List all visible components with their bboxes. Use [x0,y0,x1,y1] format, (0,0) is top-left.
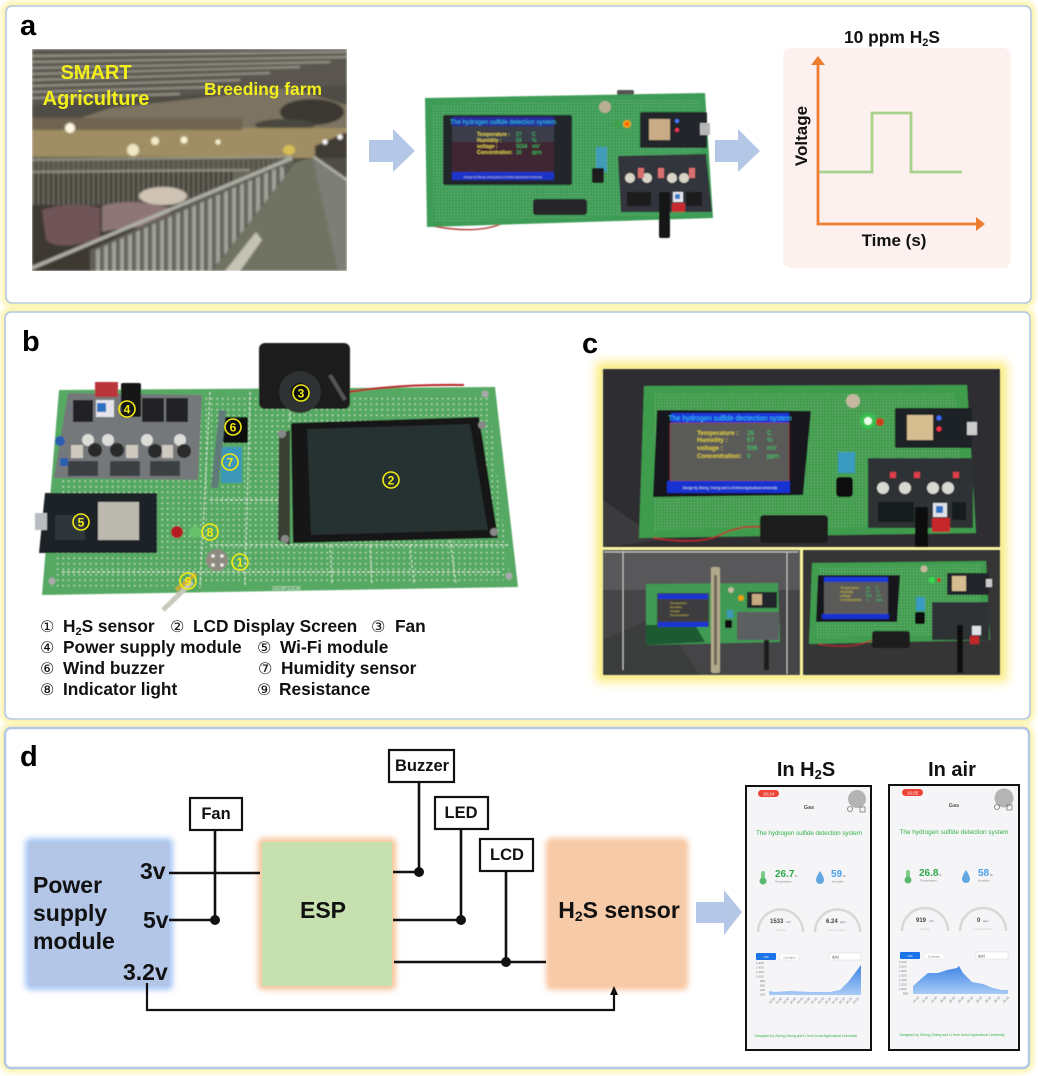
temperature reading: Temperature [920,878,937,882]
component number markers: 6 [230,420,237,434]
area chart: 1,000 [756,974,764,978]
component legend: Wi-Fi module [280,637,389,657]
circuit board photo: The hydrogen sulfide detection system [450,119,556,126]
area chart: 25:00 [957,995,965,1004]
photo: breeding farm [32,49,347,271]
tabs: 实时 [978,954,986,958]
phone: in H2S [746,786,871,1050]
gauges: ppm [983,919,989,923]
bottom right photo: Concentration: [840,598,862,602]
area chart: 24:20 [838,996,846,1005]
area chart [899,960,1010,1004]
component legend: ① [40,617,54,636]
humidity reading: Humidity [978,878,990,882]
chart title: 2 [922,37,928,49]
temperature reading [760,869,798,884]
main photo: 57 [747,437,755,444]
area chart: 24:15 [824,996,832,1005]
axes [818,64,978,224]
area chart: 25:20 [984,995,992,1004]
tabs [756,953,861,960]
area chart: 25:00 [948,995,956,1004]
circuit board photo: Humidity : [477,138,502,144]
component legend: Fan [395,616,426,636]
component legend: ③ [371,617,385,636]
main photo: % [767,437,773,444]
main photo: 0 [747,453,751,460]
Buzzer box [389,750,454,782]
temperature reading: °C [938,873,942,877]
temperature reading: °C [794,874,798,878]
main photo: C [767,430,772,437]
circuit board photo: ppm [532,150,542,156]
buzzer and humidity sensor [211,410,248,488]
component legend: ② [170,617,184,636]
indicator LEDs [171,526,201,538]
area chart: 24:20 [831,996,839,1005]
main photo [603,369,1000,547]
phone title: in H2S: In H [777,759,815,781]
main photo: ppm [767,453,779,460]
bottom right photo: 0 [866,598,868,602]
bottom right photo: % [876,590,879,594]
main photo: mV [767,445,777,452]
area chart: 1,200 [756,970,764,974]
area chart: 23:50 [775,996,783,1005]
bottom left photo: Humidity [670,605,682,609]
system title: The hydrogen sulfide detection system [900,829,1008,836]
bottom right photo: ppm [876,598,883,602]
H2S sensor block: 2 [575,908,583,924]
component number markers: 1 [237,556,244,570]
bottom right photo: Humidity [840,590,853,594]
bottom right photo [803,550,1000,675]
component legend [40,616,426,699]
H2S sensor block [546,838,688,990]
main photo: Design by Zheng, Cheng and Li of Anhui Agricultural University [683,486,778,490]
label b: b [22,326,40,358]
ESP block [258,838,396,990]
bottom right photo: mV [876,594,882,598]
gauges: Voltage [920,927,930,931]
component legend: ⑥ [40,659,54,678]
component number markers: 3 [298,386,305,400]
component legend: Resistance [279,679,371,699]
power supply module [54,382,202,480]
wiring [147,782,618,1010]
humidity reading: % [990,873,993,877]
area chart: 25:20 [966,995,974,1004]
status bar [902,789,923,796]
phone title: in air: In air [928,759,976,781]
bottom left photo: voltage [670,609,680,613]
circuit board photo: C [532,132,536,138]
LCD screen [278,417,498,545]
circuit board photo: 5034 [516,144,527,150]
bottom right photo: 26 [866,586,870,590]
fan [259,343,350,413]
gauges: Concentration [974,927,993,931]
Fan box: Fan [201,805,231,823]
main photo: voltage : [697,445,723,452]
humidity reading: Humidity [832,880,844,884]
area chart: 800 [760,979,765,983]
area chart: 24:20 [912,995,920,1004]
tabs: Volt [763,955,769,959]
area chart: 1,000 [899,987,907,991]
area chart: 600 [760,984,765,988]
system title: The hydrogen sulfide detection system [756,830,862,837]
response line [818,113,962,172]
circuit board photo: 53 [516,138,522,144]
component legend: Indicator light [63,679,177,699]
area chart: 24:05 [803,996,811,1005]
gauges: 919 [916,918,927,924]
circuit board photo: Concentration: [477,150,513,156]
area chart: 1,600 [756,961,764,965]
phone: in air [889,785,1019,1050]
phone: in air: Gas [949,803,959,809]
photo group c [596,362,1007,682]
panel a [6,6,1031,303]
component number markers: 5 [78,516,85,530]
gauges: ppm [840,920,846,924]
area chart: 25:20 [975,995,983,1004]
bottom right photo: 596 [866,594,872,598]
gauges: Concentration [828,928,847,932]
component number markers: 2 [388,474,395,488]
area chart: 24:24 [852,996,860,1005]
component legend: ⑦ [258,659,272,678]
power supply block: 5v [143,907,169,933]
component legend: 2 [75,626,82,638]
Wi-Fi module [35,493,157,553]
area chart: 1,400 [756,966,764,970]
phone: in H2S: Gas [804,805,814,811]
area chart: 24:40 [930,995,938,1004]
ESP block: ESP [300,897,346,923]
gauges: mV [929,919,934,923]
resistor [163,582,192,610]
temperature reading: 26.7 [775,869,795,880]
area chart: 24:10 [810,996,818,1005]
H2S sensor [206,549,228,571]
gauges: Voltage [776,928,786,932]
circuit board photo: % [532,138,537,144]
area chart: 200 [760,992,765,996]
component legend: S sensor [82,616,155,636]
footer text: Designed by Zheng,Cheng and Li from Anhui Agricultural University [755,1034,857,1038]
chart title: 10 ppm H [844,27,922,47]
circuit board photo: Design by Zheng, Cheng and Li of Anhui Agricultural University [464,175,543,179]
humidity reading [816,869,846,884]
panel d [5,728,1029,1068]
arrow 2 [715,129,760,172]
temperature reading [904,868,942,884]
footer text: Designed by Zheng,Cheng and Li from Anhui Agricultural University [900,1033,1005,1037]
LCD box [480,839,533,871]
power supply block: 3.2v [123,959,168,985]
photo: breeding farm: SMART [60,62,132,84]
component legend: ⑨ [257,680,271,699]
status bar [758,790,779,797]
gauges [758,910,860,932]
tabs: Con/ppm [928,954,941,958]
circuit board photo: Temperature : [477,132,510,138]
main photo: Temperature : [697,430,739,437]
panel b and c container [5,312,1030,719]
x label: Time (s) [862,231,926,250]
LED box [435,797,488,829]
area chart: 25:20 [993,995,1001,1004]
bottom right photo: 57 [866,590,870,594]
circuit board photo [425,90,713,238]
area chart [756,961,861,1005]
gauges: mV [786,920,790,924]
humidity reading [962,868,993,883]
label c: c [582,328,598,360]
area chart: 24:00 [796,996,804,1005]
circuit board photo: voltage : [477,144,498,150]
component legend: Humidity sensor [281,658,417,678]
LED box: LED [444,804,478,822]
component number markers: 8 [207,526,214,540]
voltage chart [783,27,1011,268]
status bar: 16:25 [907,790,919,796]
arrow to phones [696,890,742,935]
bottom right photo: Temperature : [840,586,861,590]
component legend: ④ [40,638,54,657]
tabs [900,952,1008,959]
Fan box [190,798,242,830]
tabs: 实时 [832,954,840,960]
arrow 1 [369,129,415,172]
power supply block: 3v [140,858,166,884]
area chart: 23:50 [768,996,776,1005]
area chart: 2,000 [899,964,907,968]
circuit board photo: 10 [516,150,522,156]
area chart: 24:24 [845,996,853,1005]
area chart: 1,200 [899,982,907,986]
area chart: 400 [760,988,765,992]
component number markers [73,385,399,589]
area chart: 800 [903,992,908,996]
H2S sensor block: H [558,897,575,923]
gauges: 1533 [770,919,784,925]
component number markers: 9 [185,574,192,588]
main photo: Concentration: [697,453,742,460]
humidity reading: 59 [831,869,843,880]
chart title: S [928,27,940,47]
H2S sensor block: S sensor [583,897,680,923]
status bar: 16:24 [763,792,775,796]
component legend: H [63,616,75,636]
temperature reading: 26.8 [919,868,939,879]
area chart: 24:40 [921,995,929,1004]
labelled components board [35,343,518,610]
area chart: 24:00 [789,996,797,1005]
humidity reading: 58 [978,868,990,879]
phone title: in H2S: S [822,759,835,781]
photo: breeding farm: Breeding farm [204,79,322,99]
Buzzer box: Buzzer [395,757,450,775]
phone title: in H2S: 2 [815,767,822,782]
bottom left photo: Concentration [670,613,689,617]
tabs: Con/ppm [783,956,796,960]
area chart: 2,200 [899,960,907,964]
component number markers: 7 [227,456,234,470]
LCD box: LCD [490,846,524,864]
humidity reading: % [843,874,846,878]
component legend: ⑤ [257,638,271,657]
bottom left photo [603,550,800,675]
gauges: 6.24 [826,919,838,925]
temperature reading: Temperature [775,880,792,884]
bottom left photo: Temperature [670,601,687,605]
area chart: 1,400 [899,978,907,982]
area chart: 25:25 [1002,995,1010,1004]
label a: a [20,10,37,42]
area chart: 25:00 [939,995,947,1004]
photo: breeding farm: Agriculture [43,88,149,110]
power supply block [25,838,173,990]
power supply block: supply [33,900,107,926]
fan wire [348,385,464,392]
power supply block: module [33,928,115,954]
area chart: 23:50 [782,996,790,1005]
tabs: Volt [907,954,913,958]
component legend: LCD Display Screen [193,616,357,636]
area chart: 1,800 [899,969,907,973]
label d: d [20,741,38,773]
component legend: Power supply module [63,637,242,657]
labelled components board: 10CM*22CM [272,586,301,592]
area chart: 1,600 [899,974,907,978]
gauges [902,908,1006,931]
component legend: Wind buzzer [63,658,165,678]
circuit board photo: mV [532,144,540,150]
y label: Voltage [792,106,811,166]
bottom right photo: voltage [840,594,851,598]
gauges: 0 [977,918,981,924]
main photo: Humidity : [697,437,728,444]
bottom right photo: C [876,586,879,590]
power supply block: Power [33,872,102,898]
main photo: 596 [747,445,758,452]
component legend: ⑧ [40,680,54,699]
main photo: The hydrogen sulfide dectection system [668,416,792,422]
circuit board photo: 27 [516,132,522,138]
area chart: 24:10 [817,996,825,1005]
main photo: 26 [747,430,755,437]
component number markers: 4 [124,402,131,416]
